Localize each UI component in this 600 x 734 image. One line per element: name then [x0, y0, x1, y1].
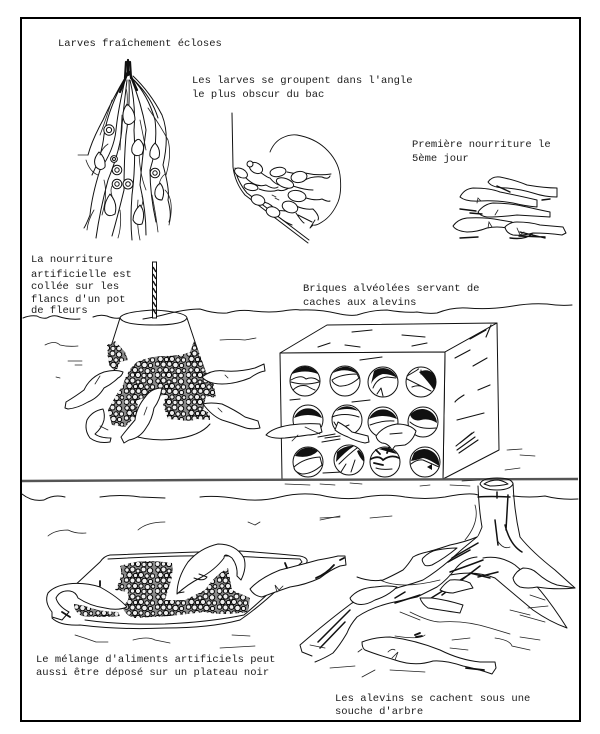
tank wall: [232, 113, 309, 243]
illustration: perforated brick: [266, 323, 499, 479]
caption: fry hide under stump: souche d'arbre: [335, 706, 423, 718]
illustration: group of young fish: [453, 177, 566, 238]
fish emerging: [376, 424, 416, 450]
fish under root: tail: [420, 598, 463, 613]
zoom bubble: [270, 135, 341, 228]
left curled fish: [47, 583, 127, 620]
top fish: [177, 544, 245, 594]
caption: food on flower pot: artificielle est: [31, 269, 132, 281]
illustration: flower pot with food and fish: [45, 262, 265, 443]
fish E: [86, 409, 111, 442]
water surface lower: [22, 494, 578, 500]
fish under root: upper: [422, 548, 457, 566]
caption: bricks as hideouts: Briques alvéolées servant de: [303, 283, 479, 295]
caption: food on black tray: Le mélange d'aliments artificiels peut: [36, 654, 275, 666]
fish under root: left: [350, 586, 397, 604]
caption: larvae grouping in corner: le plus obscur du bac: [192, 89, 324, 101]
illustration: larvae in darkest corner of tank: [232, 113, 341, 243]
water marks around tray: [48, 517, 340, 648]
pot body: [108, 310, 210, 440]
illustration: tree stump with hiding fish: [300, 478, 575, 677]
brick holes: [290, 366, 440, 477]
caption: food on flower pot: de fleurs: [31, 305, 88, 317]
illustration: larvae hanging on fibre tuft: [78, 60, 171, 240]
bottom fish: [362, 637, 496, 674]
floor line: [22, 479, 578, 481]
caption: food on flower pot: La nourriture: [31, 254, 113, 266]
caption: food on flower pot: collée sur les: [31, 281, 119, 293]
water marks around pot: [45, 338, 256, 378]
root hatching: [318, 492, 522, 648]
food pellets: [107, 341, 216, 427]
fish leaving hole left: [266, 424, 322, 438]
water surface upper: [23, 304, 572, 319]
food pellets on tray: [74, 561, 250, 618]
tray: [52, 551, 307, 629]
caption: freshly hatched larvae: Larves fraîchement écloses: [58, 38, 222, 50]
larvae group: [233, 160, 331, 225]
fish C: [203, 403, 260, 429]
right root: [450, 557, 567, 628]
caption: first feeding: Première nourriture le: [412, 139, 551, 151]
brick body: [280, 323, 497, 353]
fish B: [202, 364, 265, 384]
caption: first feeding: 5ème jour: [412, 153, 469, 165]
main root: [300, 537, 477, 662]
floor marks: [285, 449, 535, 486]
caption: bricks as hideouts: caches aux alevins: [303, 297, 416, 309]
right fish: [250, 556, 346, 597]
caption: food on flower pot: flancs d'un pot: [31, 294, 126, 306]
caption: food on black tray: aussi être déposé sur un plateau noir: [36, 667, 269, 679]
fish right of stump: [513, 568, 575, 589]
stump trunk and roots: [357, 478, 575, 588]
rope: [152, 262, 156, 318]
caption: larvae grouping in corner: Les larves se groupent dans l'angle: [192, 75, 413, 87]
fish A: [65, 370, 123, 409]
fish under root: head right: [440, 580, 473, 593]
illustration: tray with food and fish: [47, 517, 346, 648]
larvae spirals: [104, 125, 160, 189]
fish with tail out: [335, 422, 369, 443]
fish D: [121, 388, 162, 443]
caption: fry hide under stump: Les alevins se cachent sous une: [335, 693, 530, 705]
larva bodies: [95, 88, 165, 224]
